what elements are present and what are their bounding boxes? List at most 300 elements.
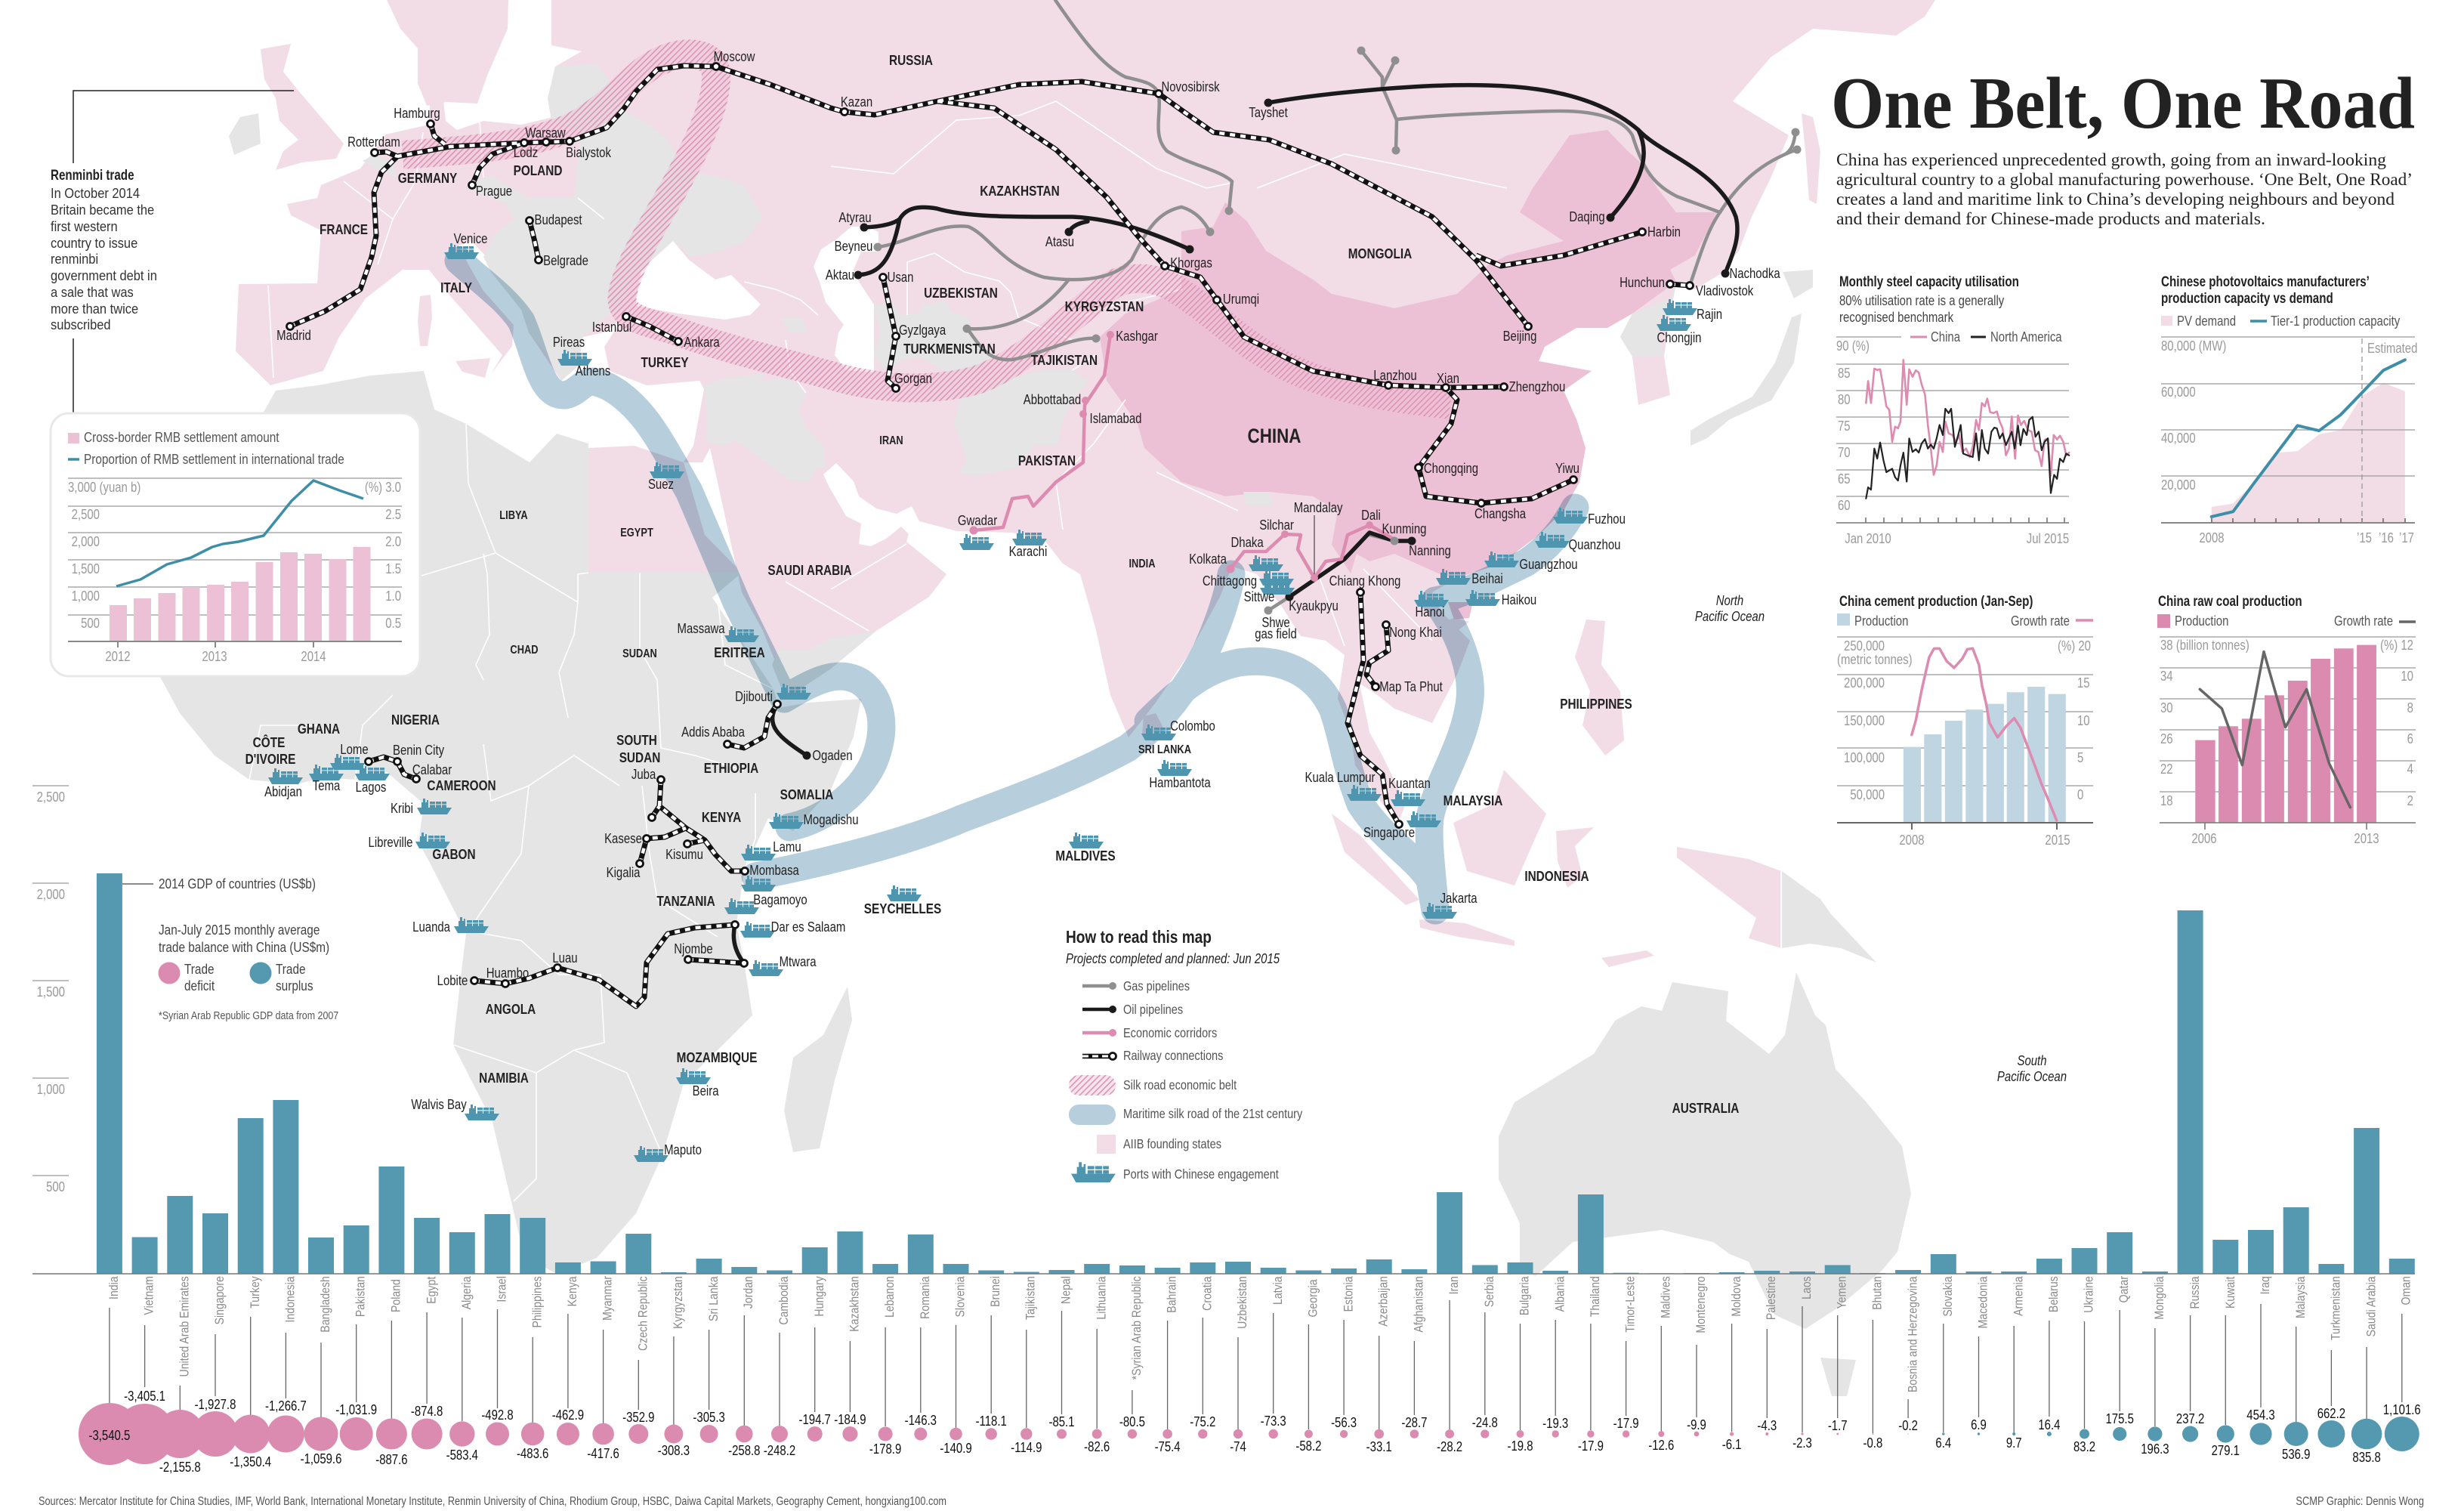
axis labels: steel: 90 (%)	[1836, 338, 1870, 354]
city labels: Benin City	[393, 743, 445, 758]
panel: RMB settlement chart	[51, 413, 420, 676]
callout: Renminbi trade	[51, 91, 294, 413]
callout: Renminbi trade: subscribed	[51, 317, 111, 332]
city labels: Tema	[313, 778, 341, 793]
axis labels: cement: (%) 20	[2058, 638, 2091, 654]
legend key: silk road economic belt	[1069, 1075, 1237, 1095]
country labels: large: KAZAKHSTAN	[980, 184, 1060, 199]
city labels: Novosibirsk	[1161, 79, 1220, 94]
legend: steel: China	[1931, 329, 1961, 345]
country name labels: Serbia	[1483, 1276, 1496, 1307]
country labels: large: ERITREA	[714, 645, 765, 660]
city labels: Lagos	[356, 780, 386, 795]
axis labels: coal: 2013	[2354, 831, 2379, 846]
country name labels: Afghanistan	[1412, 1276, 1426, 1333]
city labels: Lome	[340, 742, 369, 757]
key: GDP and trade balance: Jan-July 2015 monthly average	[159, 922, 320, 938]
country labels: small: IRAN	[879, 434, 903, 447]
city labels: Bagamoyo	[753, 892, 807, 907]
country name labels: Egypt	[425, 1276, 439, 1304]
trade balance values: -0.2	[1898, 1418, 1918, 1433]
city labels: Chiang Khong	[1329, 573, 1400, 589]
trade balance values: -85.1	[1048, 1414, 1075, 1429]
city labels: Nanning	[1409, 543, 1451, 558]
country name labels: Palestine	[1765, 1276, 1779, 1320]
city labels: Kuala Lumpur	[1305, 770, 1376, 785]
subtitle: steel benchmark	[1839, 293, 2005, 325]
city labels: Aktau	[826, 267, 854, 283]
country name labels: Latvia	[1271, 1276, 1285, 1305]
country name labels: Macedonia	[1977, 1276, 1990, 1328]
axis labels: steel: 85	[1838, 366, 1851, 381]
axis labels: 1.0	[385, 589, 401, 604]
axis labels: steel: 80	[1838, 392, 1851, 407]
legend: photovoltaics: Tier-1 production capacity	[2271, 314, 2401, 329]
trade balance values: -3,405.1	[124, 1389, 165, 1404]
key: GDP and trade balance: 2014 GDP of countries (US$b)	[159, 876, 316, 891]
lines: steel utilisation	[1866, 360, 2069, 499]
city labels: Hamburg	[394, 106, 440, 121]
country name labels: Nepal	[1059, 1276, 1073, 1304]
city labels: Kazan	[841, 94, 872, 110]
bubbles: trade deficit	[79, 1403, 1909, 1465]
country name labels: Uzbekistan	[1236, 1276, 1249, 1329]
country name labels: Timor-Leste	[1623, 1276, 1638, 1333]
axis labels: coal: 18	[2160, 793, 2173, 808]
country name labels	[107, 1276, 2413, 1392]
country labels: large: TURKEY	[641, 355, 689, 370]
city labels: Suez	[648, 477, 674, 492]
bubbles: trade surplus	[1942, 1417, 2419, 1451]
country labels: small: SUDAN	[622, 647, 657, 660]
city labels: Chongqing	[1424, 461, 1478, 476]
trade balance values: -6.1	[1722, 1437, 1741, 1452]
trade balance values: 1,101.6	[2383, 1402, 2421, 1417]
country labels: small: LIBYA	[499, 509, 528, 522]
country name labels: Bhutan	[1870, 1276, 1885, 1310]
city labels: Atasu	[1045, 234, 1074, 249]
city labels: Harbin	[1647, 224, 1681, 239]
city labels: Bialystok	[566, 145, 612, 160]
country labels: large: ETHIOPIA	[704, 761, 758, 776]
country labels: large: SOUTH	[616, 733, 657, 748]
trade balance values: -140.9	[940, 1441, 972, 1456]
city labels: Quanzhou	[1569, 537, 1620, 552]
city labels: Kuantan	[1388, 776, 1431, 791]
legend key: AIIB founding states	[1097, 1135, 1221, 1154]
country name labels: India	[107, 1276, 122, 1299]
country labels: large: MALDIVES	[1055, 848, 1116, 864]
axis labels: steel: 75	[1838, 419, 1851, 434]
country labels: large: NIGERIA	[391, 712, 440, 728]
country name labels: Yemen	[1835, 1276, 1849, 1309]
axis labels: 2012	[105, 649, 131, 664]
trade balance values: -1,031.9	[335, 1402, 377, 1417]
GDP axis gridlines and labels: 2,500	[37, 789, 65, 805]
trade balance values: -583.4	[446, 1448, 478, 1463]
city labels: Athens	[576, 363, 610, 379]
trade balance values: -305.3	[693, 1410, 725, 1425]
axis labels: cement: 200,000	[1844, 675, 1885, 691]
city labels: Lanzhou	[1373, 368, 1417, 383]
land: Egypt	[588, 446, 742, 573]
trade balance values: -462.9	[552, 1407, 584, 1423]
city labels: Addis Ababa	[681, 725, 746, 740]
country labels: large: PHILIPPINES	[1560, 697, 1632, 712]
chart: photovoltaics capacity vs demand	[2161, 273, 2417, 545]
ocean labels: South	[2017, 1053, 2047, 1068]
city labels: Istanbul	[592, 320, 631, 335]
country labels: large: PAKISTAN	[1018, 453, 1076, 468]
axis labels: steel: 65	[1838, 471, 1851, 487]
legend: coal: Growth rate	[2334, 613, 2393, 629]
icons: ports with Chinese engagement	[268, 243, 1697, 1162]
city labels: Moscow	[714, 49, 755, 64]
city labels: Daqing	[1569, 209, 1605, 224]
seas: Black Sea and Caspian Sea	[636, 227, 878, 372]
GDP baseline	[32, 1273, 2415, 1275]
country name labels: Bangladesh	[319, 1276, 332, 1333]
country name labels: *Syrian Arab Republic	[1130, 1276, 1144, 1380]
axis labels: cement: 2008	[1899, 833, 1925, 848]
trade balance values: -114.9	[1011, 1440, 1042, 1455]
city labels: Khorgas	[1170, 255, 1212, 270]
oil pipeline end points	[802, 98, 1730, 760]
country name labels: Slovenia	[954, 1276, 968, 1317]
trade balance values: 536.9	[2282, 1447, 2310, 1462]
city labels: gas field	[1255, 626, 1297, 641]
city labels: Shwe	[1261, 615, 1290, 630]
country name labels: Bahrain	[1165, 1276, 1179, 1313]
ocean labels: North	[1716, 593, 1743, 608]
chart heading second line: production capacity vs demand	[2161, 289, 2333, 306]
axis labels: 2,500	[72, 507, 100, 522]
country labels: small: SRI LANKA	[1138, 743, 1191, 756]
line: cement growth rate	[1912, 648, 2057, 820]
trade balance values: -2,155.8	[159, 1460, 201, 1475]
city labels: Gwadar	[958, 513, 998, 528]
axis labels: coal: 2	[2407, 793, 2413, 808]
trade balance values: 454.3	[2246, 1407, 2275, 1423]
GDP axis gridlines and labels: 2,000	[37, 887, 65, 902]
country name labels: Singapore	[213, 1276, 227, 1324]
axis labels: coal: 10	[2401, 669, 2413, 684]
country name labels: Oman	[2400, 1276, 2413, 1306]
city labels: Guangzhou	[1519, 557, 1578, 572]
axis labels: 1,000	[72, 589, 100, 604]
city labels: Tayshet	[1249, 105, 1288, 120]
axis labels: coal: 8	[2407, 700, 2413, 715]
country labels: large: GHANA	[298, 722, 340, 737]
trade balance values: -82.6	[1084, 1439, 1110, 1454]
country name labels: Slovakia	[1941, 1276, 1955, 1317]
city labels: Colombo	[1170, 718, 1215, 734]
country name labels: Laos	[1800, 1276, 1814, 1299]
intro text: and their demand for Chinese-made products and materials.	[1836, 209, 2265, 228]
legend: how to read this map: How to read this map	[1066, 928, 1212, 947]
legend: coal	[2157, 613, 2416, 629]
axis labels: photovoltaics: 80,000 (MW)	[2161, 338, 2226, 354]
legend: photovoltaics: PV demand	[2177, 314, 2236, 329]
city labels: Ogaden	[812, 748, 853, 763]
land: Eurasia, AIIB founding states	[236, 0, 1935, 825]
trade balance values: -17.9	[1578, 1438, 1604, 1454]
trade balance values: -24.8	[1472, 1415, 1498, 1430]
axis labels: 0.5	[385, 616, 401, 631]
axis labels: cement: 15	[2077, 675, 2090, 691]
country name labels: Bulgaria	[1518, 1276, 1532, 1315]
legend key: maritime silk road: Maritime silk road of the 21st century	[1123, 1107, 1302, 1121]
trade balance values: -483.6	[517, 1446, 548, 1461]
country name labels: Iran	[1447, 1276, 1461, 1294]
trade balance values: -73.3	[1261, 1414, 1286, 1429]
city labels: Rotterdam	[347, 134, 400, 150]
country name labels: Estonia	[1342, 1276, 1356, 1312]
legend key: ports: Ports with Chinese engagement	[1123, 1167, 1279, 1182]
country name labels: Albania	[1553, 1276, 1567, 1312]
legend key: economic corridors: Economic corridors	[1123, 1026, 1217, 1040]
country labels: large: SUDAN	[619, 750, 660, 765]
country name labels: Tajikistan	[1024, 1276, 1038, 1320]
chart: China raw coal production	[2157, 592, 2416, 846]
trade balance values: -12.6	[1648, 1438, 1674, 1453]
legend: how to read this map	[1066, 928, 1302, 1182]
trade balance values: 9.7	[2006, 1435, 2022, 1451]
country name labels: Pakistan	[354, 1276, 368, 1317]
trade balance values: -1,927.8	[195, 1397, 236, 1412]
city labels: Gyzlgaya	[899, 323, 946, 338]
axis labels: 500	[81, 616, 100, 631]
trade balance values: -248.2	[764, 1443, 795, 1458]
trade balance values: -194.7	[799, 1412, 831, 1427]
city labels: Kunming	[1382, 521, 1426, 536]
city labels: Dar es Salaam	[771, 919, 845, 935]
callout: Renminbi trade: renminbi	[51, 251, 98, 267]
country name labels: Qatar	[2117, 1276, 2131, 1302]
legend key: economic corridors	[1082, 1026, 1217, 1040]
country labels: large: ITALY	[440, 280, 473, 295]
axis labels: 2014	[301, 649, 326, 664]
chart: photovoltaics capacity vs demand: Chinese photovoltaics manufacturers’	[2161, 273, 2370, 289]
country name labels: Algeria	[460, 1276, 474, 1309]
legend key: ports	[1071, 1162, 1279, 1182]
country name labels: Kenya	[566, 1276, 579, 1306]
city labels: Prague	[476, 184, 512, 199]
chart: monthly steel capacity utilisation	[1836, 273, 2069, 546]
line: RMB settlement proportion	[116, 480, 363, 586]
country name labels: Mongolia	[2153, 1276, 2166, 1320]
axis labels: cement: 150,000	[1844, 713, 1885, 728]
callout: Renminbi trade: Britain became the	[51, 202, 154, 218]
city labels: Budapest	[534, 212, 582, 227]
axis labels: (%) 3.0	[365, 480, 401, 495]
GDP axis gridlines and labels	[32, 786, 69, 1194]
ocean labels: Pacific Ocean	[1997, 1069, 2067, 1084]
legend: RMB settlement: Proportion of RMB settlement in international trade	[84, 452, 344, 467]
source note: Sources: Mercator Institute for China Studies, IMF, World Bank, International Monetary Institute, Renmin University of China, Rhodium Group, HSBC, Daiwa Capital Markets, Geography Cement, hongxiang100.com	[39, 1495, 946, 1508]
city labels: Dhaka	[1230, 535, 1264, 550]
callout: Renminbi trade: a sale that was	[51, 284, 134, 300]
legend: RMB settlement	[68, 430, 344, 467]
country labels: large: TAJIKISTAN	[1031, 353, 1098, 368]
land: China	[1100, 130, 1717, 620]
trade balance values: -874.8	[411, 1404, 443, 1419]
country name labels: Georgia	[1306, 1279, 1320, 1318]
key: GDP and trade balance: *Syrian Arab Republic GDP data from 2007	[159, 1009, 338, 1021]
city labels: Beijing	[1503, 329, 1536, 344]
country labels: large: CÔTE	[253, 735, 285, 750]
country name labels: Kuwait	[2224, 1276, 2237, 1309]
city labels: Changsha	[1474, 506, 1527, 521]
country name labels: Romania	[919, 1276, 932, 1319]
callout: Renminbi trade: Renminbi trade	[51, 166, 134, 183]
trade balance values: -28.2	[1437, 1439, 1462, 1454]
axis labels: cement: 100,000	[1844, 750, 1885, 765]
axis labels: photovoltaics: ’16	[2379, 530, 2394, 545]
country name labels: Philippines	[530, 1276, 545, 1327]
city labels: Xian	[1437, 371, 1459, 386]
axis labels: photovoltaics: 2008	[2199, 530, 2225, 545]
GDP axis gridlines and labels: 1,000	[37, 1082, 65, 1097]
country name labels: Myanmar	[601, 1276, 615, 1321]
city labels: Haikou	[1502, 592, 1536, 607]
axis labels: steel	[1836, 338, 2069, 546]
trade balance values: 175.5	[2106, 1411, 2134, 1426]
country name labels: Israel	[495, 1276, 509, 1302]
bars: cement production	[1904, 687, 2066, 823]
country labels: large: INDONESIA	[1524, 869, 1589, 884]
city labels: Kribi	[391, 801, 413, 816]
trade balance values: -56.3	[1331, 1415, 1357, 1430]
callout: Renminbi trade: more than twice	[51, 301, 138, 317]
ocean labels	[1695, 593, 2067, 1084]
gas pipelines	[878, 0, 1797, 610]
trade balance values: 835.8	[2352, 1450, 2381, 1465]
country name labels: Montenegro	[1694, 1276, 1709, 1333]
trade balance values: -492.8	[481, 1407, 514, 1423]
GDP axis gridlines and labels: 1,500	[37, 984, 65, 1000]
country name labels: Jordan	[742, 1276, 756, 1309]
trade balance values: 279.1	[2212, 1443, 2240, 1458]
land: pink islands and Scandinavia	[261, 0, 1820, 967]
area: PV demand	[2212, 383, 2405, 523]
axis labels: cement: 250,000	[1844, 638, 1885, 654]
oil pipelines	[733, 85, 1737, 963]
country name labels: Russia	[2188, 1276, 2202, 1309]
city labels: Chittagong	[1203, 573, 1257, 589]
map: land masses	[151, 0, 1935, 1396]
railway connections	[290, 66, 1690, 1006]
trade balance values: -4.3	[1757, 1418, 1777, 1433]
city labels: Mtwara	[780, 954, 817, 969]
city labels: Beyneu	[835, 239, 872, 254]
country name labels: Turkey	[249, 1276, 262, 1309]
axis labels: coal: 6	[2407, 731, 2413, 746]
city labels: Lamu	[773, 839, 801, 854]
axis labels: cement: 2015	[2045, 833, 2070, 848]
chart: China cement production	[1837, 592, 2093, 848]
axis labels: cement: 10	[2077, 713, 2090, 728]
city labels: Atyrau	[838, 210, 872, 225]
country labels: large: D'IVOIRE	[245, 752, 295, 767]
callout: Renminbi trade: first western	[51, 218, 118, 234]
key: GDP and trade balance: surplus	[276, 978, 313, 993]
country label: China: CHINA	[1248, 425, 1301, 448]
city labels: Massawa	[678, 621, 725, 636]
country name labels: Kazakhstan	[848, 1276, 862, 1332]
key: GDP and trade balance: Trade	[184, 962, 215, 977]
axis labels: cement: 50,000	[1850, 787, 1885, 802]
trade balance values: -80.5	[1119, 1414, 1145, 1429]
key: GDP and trade balance	[122, 876, 338, 1021]
axis labels: 2.5	[385, 507, 401, 522]
country name labels: Azerbaijan	[1376, 1276, 1391, 1327]
axis labels: photovoltaics: 40,000	[2161, 431, 2196, 446]
legend key: railway connections: Railway connections	[1123, 1049, 1223, 1063]
city labels: Kashgar	[1116, 329, 1158, 344]
country labels: large: SOMALIA	[780, 787, 833, 802]
country labels: small	[499, 434, 1191, 756]
axis labels: photovoltaics: 20,000	[2161, 477, 2196, 493]
country name labels: Czech Republic	[636, 1276, 650, 1351]
trade balance values: -19.8	[1507, 1438, 1533, 1454]
country name labels: Armenia	[2012, 1276, 2026, 1316]
railway stations	[287, 63, 1694, 987]
country name labels: Brunei	[989, 1276, 1002, 1307]
trade balance values: -3,540.5	[89, 1428, 130, 1443]
city labels: Vladivostok	[1696, 283, 1754, 298]
city labels: Islamabad	[1090, 411, 1141, 426]
land: non-member states of Eurasia	[363, 64, 1676, 699]
city labels: Beihai	[1471, 571, 1503, 586]
country labels: large: ANGOLA	[486, 1002, 536, 1017]
trade balance values: -17.9	[1613, 1416, 1639, 1431]
trade balance values: -146.3	[905, 1413, 937, 1428]
country name labels: Lebanon	[883, 1276, 897, 1318]
trade balance values: -2.3	[1792, 1435, 1812, 1451]
legend key: oil pipelines: Oil pipelines	[1123, 1003, 1183, 1017]
city labels: Abidjan	[264, 784, 302, 799]
city labels: Libreville	[369, 835, 412, 850]
trade balance values: -19.3	[1542, 1416, 1568, 1431]
axis labels: 1,500	[72, 561, 100, 576]
gas pipeline end points	[873, 47, 1801, 615]
legend subtitle: Projects completed and planned: Jun 2015	[1066, 951, 1280, 966]
trade balance values: 83.2	[2073, 1439, 2095, 1454]
city labels: Zhengzhou	[1509, 379, 1565, 394]
city labels: Lodz	[514, 145, 538, 160]
bar chart: 2014 GDP of countries	[32, 786, 2415, 1274]
trade balance values: -75.4	[1155, 1439, 1181, 1454]
axis labels: coal: 34	[2160, 669, 2173, 684]
legend key: silk road economic belt: Silk road economic belt	[1123, 1078, 1237, 1092]
country name labels: Belarus	[2047, 1276, 2061, 1312]
country name labels: Hungary	[813, 1276, 826, 1317]
chart: monthly steel capacity utilisation: Monthly steel capacity utilisation	[1839, 273, 2019, 289]
country name labels: Cambodia	[777, 1276, 792, 1325]
axis labels: coal: 26	[2160, 731, 2173, 746]
country labels: small: EGYPT	[620, 527, 653, 539]
trade balance values: -352.9	[622, 1410, 654, 1425]
trade balance values: -0.8	[1863, 1435, 1882, 1451]
axis labels: photovoltaics: ’15	[2357, 530, 2372, 545]
city labels: Ankara	[684, 335, 720, 350]
city labels: Kyaukpyu	[1289, 598, 1339, 613]
callout: Renminbi trade: government debt in	[51, 267, 157, 283]
country labels: large: RUSSIA	[889, 53, 933, 68]
trade balance values: -33.1	[1366, 1439, 1392, 1454]
leader lines from countries to bubbles	[110, 1300, 2402, 1433]
